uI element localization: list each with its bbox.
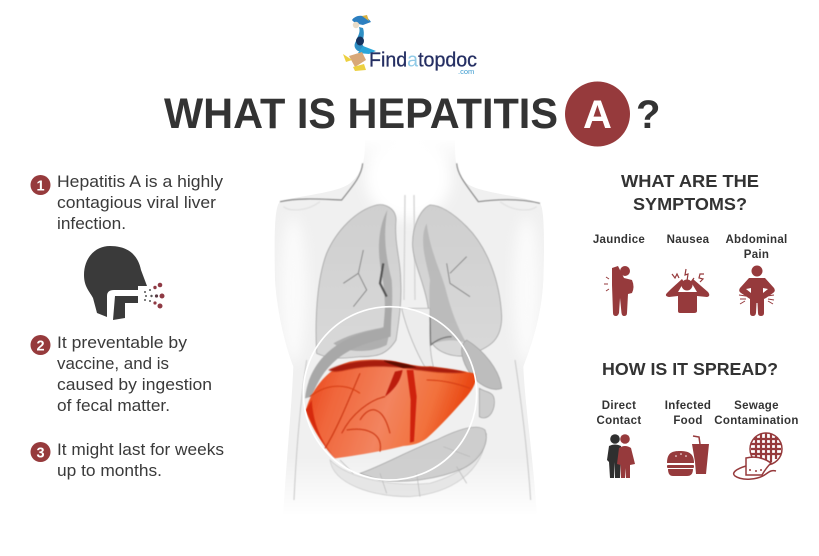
icon: duck mascot <box>343 15 376 71</box>
spread labels: Contamination <box>714 415 799 427</box>
spread labels: Sewage <box>734 400 779 412</box>
fact 1 <box>30 173 224 233</box>
fact 1: Hepatitis A is a highly <box>57 173 224 191</box>
icon: nausea <box>666 269 709 313</box>
icon: sewage contamination <box>734 433 782 479</box>
icon: abdominal pain <box>739 266 775 316</box>
symptoms heading <box>621 171 759 214</box>
icon: coughing head <box>84 246 164 320</box>
fact 3: up to months. <box>57 462 162 480</box>
icon: direct contact <box>607 434 635 478</box>
logo .com: .com <box>458 67 474 76</box>
title badge A: A <box>583 93 612 137</box>
spread labels: Contact <box>597 415 641 427</box>
lungs <box>305 205 502 418</box>
panel: symptoms <box>593 171 788 316</box>
symptoms heading: SYMPTOMS? <box>633 194 747 214</box>
symptoms heading: WHAT ARE THE <box>621 171 759 191</box>
body silhouette <box>274 158 544 500</box>
fact 2: vaccine, and is <box>57 355 169 373</box>
panel: facts <box>30 173 224 480</box>
fact 1: 1 <box>36 178 45 194</box>
highlight circle <box>303 307 477 480</box>
fact 2: It preventable by <box>57 334 188 352</box>
anatomy illustration <box>274 158 544 500</box>
spread labels: Direct <box>602 400 636 412</box>
fact 3 <box>30 441 224 480</box>
title <box>164 82 660 146</box>
logo wordmark: Findatopdoc <box>369 48 477 72</box>
title question mark: ? <box>636 93 660 137</box>
logo <box>343 15 477 76</box>
spread labels: Food <box>673 415 703 427</box>
fact 3: It might last for weeks <box>57 441 224 459</box>
fact 2: caused by ingestion <box>57 376 212 394</box>
spread labels: Infected <box>665 400 711 412</box>
spread heading: HOW IS IT SPREAD? <box>602 359 778 379</box>
fact 3: 3 <box>36 446 45 462</box>
title text: WHAT IS HEPATITIS <box>164 91 558 138</box>
fact 2: of fecal matter. <box>57 397 170 415</box>
fact 1: contagious viral liver <box>57 194 217 212</box>
fact 2 <box>30 334 212 415</box>
icon: infected food <box>667 436 709 476</box>
symptom labels: Abdominal <box>725 234 788 246</box>
intestines <box>330 427 487 497</box>
symptom labels: Jaundice <box>593 234 645 246</box>
liver <box>306 360 476 458</box>
icon: jaundice <box>604 266 634 316</box>
fact 1: infection. <box>57 215 126 233</box>
panel: spread <box>597 359 799 479</box>
symptom labels: Pain <box>744 249 769 261</box>
fact 2: 2 <box>36 338 45 354</box>
symptom labels: Nausea <box>667 234 710 246</box>
title badge A <box>565 82 630 146</box>
